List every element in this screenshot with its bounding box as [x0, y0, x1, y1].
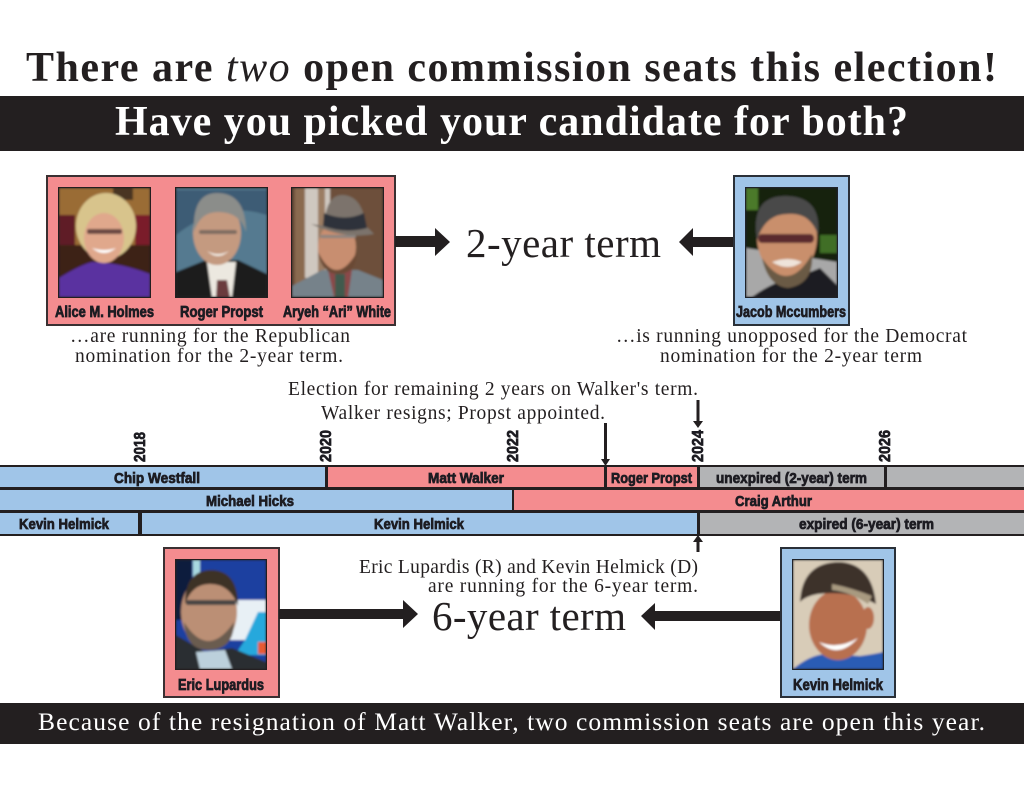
text: Democrat nomination note: nomination for the 2-year term — [660, 346, 922, 367]
footer banner — [0, 703, 1024, 744]
text: Democrat nomination note — [616, 326, 968, 367]
panel: Republican candidates for 2-year term — [47, 176, 395, 325]
row 3: 6-year seat: expired (6-year) term — [799, 516, 934, 533]
subtitle banner — [0, 96, 1024, 151]
row 1: unexpired seat: Roger Propst — [611, 470, 692, 487]
name: Alice M. Holmes: Alice M. Holmes — [55, 304, 154, 321]
panel: Kevin Helmick — [781, 548, 895, 697]
arrow: resignation marker — [601, 423, 610, 466]
arrow: Lupardus to 6-year term — [279, 600, 418, 628]
text: Democrat nomination note: …is running unopposed for the Democrat — [616, 326, 968, 347]
arrow: 6-year election marker — [693, 535, 703, 552]
row 1: unexpired seat: Chip Westfall — [114, 470, 200, 487]
timeline: seat rows — [0, 465, 1024, 536]
row 2: Hicks and Arthur seat: Craig Arthur — [735, 493, 812, 510]
row 1: unexpired seat: Matt Walker — [428, 470, 504, 487]
timeline axis years: 2020 — [318, 430, 335, 462]
subtitle banner: Have you picked your candidate for both? — [115, 99, 908, 145]
arrow: Republicans to 2-year term — [395, 228, 450, 256]
text: 6-year race note: are running for the 6-year term. — [428, 576, 698, 597]
row 3: 6-year seat: Kevin Helmick — [19, 516, 110, 533]
timeline axis years: 2018 — [132, 432, 149, 462]
timeline axis years — [132, 430, 894, 462]
text: Republican nomination note: nomination for the 2-year term. — [75, 346, 343, 367]
text: Republican nomination note: …are running for the Republican — [70, 326, 350, 347]
timeline axis years: 2022 — [505, 430, 522, 462]
row 2: Hicks and Arthur seat — [0, 490, 1024, 510]
arrow: Democrat to 2-year term — [679, 228, 734, 256]
photo: Kevin Helmick — [792, 559, 884, 670]
text: resignation note: Walker resigns; Propst appointed. — [321, 403, 605, 424]
row 2: Hicks and Arthur seat: Michael Hicks — [206, 493, 294, 510]
panel: Eric Lupardus — [164, 548, 279, 697]
row 3: 6-year seat: Kevin Helmick — [374, 516, 465, 533]
photo: Aryeh "Ari" White — [291, 187, 384, 298]
heading: 6-year term: 6-year term — [432, 593, 626, 639]
row 1: unexpired seat: unexpired (2-year) term — [716, 470, 867, 487]
row 3: 6-year seat — [0, 513, 1024, 534]
arrow: election marker — [693, 400, 703, 428]
name: Eric Lupardus: Eric Lupardus — [178, 677, 264, 694]
heading: 2-year term: 2-year term — [466, 220, 661, 266]
row 1: unexpired seat — [0, 467, 1024, 487]
name: Aryeh "Ari" White: Aryeh “Ari” White — [283, 304, 391, 321]
photo: Eric Lupardus — [175, 559, 267, 670]
text: 6-year race note: Eric Lupardis (R) and Kevin Helmick (D) — [359, 557, 698, 578]
timeline axis years: 2024 — [690, 430, 707, 462]
footer banner: Because of the resignation of Matt Walker, two commission seats are open this year. — [38, 707, 985, 736]
name: Kevin Helmick: Kevin Helmick — [793, 677, 883, 694]
panel: Democrat candidate for 2-year term — [734, 176, 849, 325]
text: 6-year race note — [359, 557, 698, 597]
arrow: Helmick to 6-year term — [641, 603, 780, 630]
photo: Roger Propst — [175, 187, 268, 298]
timeline axis years: 2026 — [877, 430, 894, 462]
photo: Alice M. Holmes — [58, 187, 151, 298]
text: Republican nomination note — [70, 326, 350, 367]
name: Roger Propst: Roger Propst — [180, 304, 263, 321]
title: There are two open commission seats this election! — [26, 45, 997, 91]
photo: Jacob Mccumbers — [745, 187, 838, 298]
name: Jacob Mccumbers: Jacob Mccumbers — [736, 304, 846, 321]
text: election note: Election for remaining 2 years on Walker's term. — [288, 379, 698, 400]
